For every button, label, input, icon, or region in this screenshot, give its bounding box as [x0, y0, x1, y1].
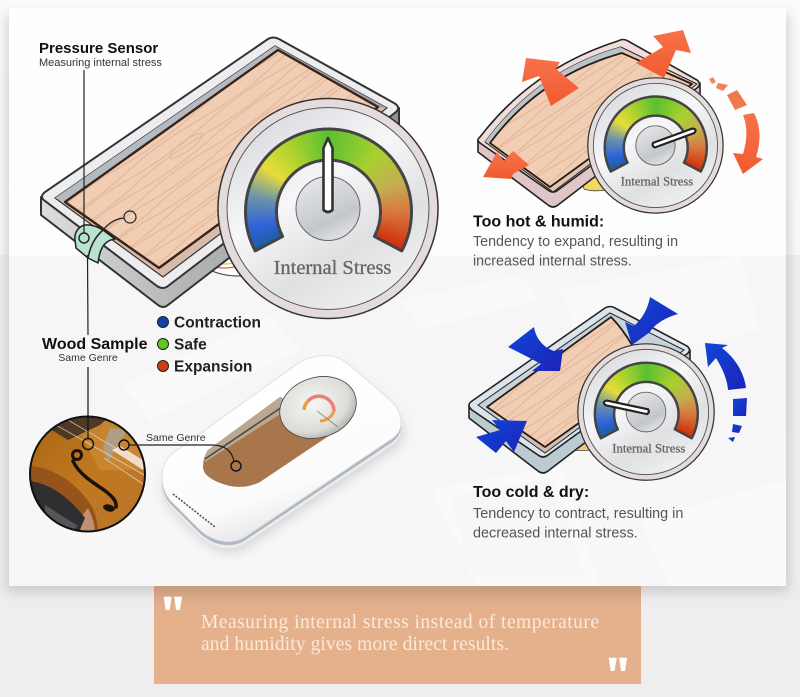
violin border	[30, 416, 145, 532]
cold recess	[478, 313, 684, 453]
gauge: cold and dry	[578, 344, 715, 481]
text block: too cold and dry: decreased internal stress.	[473, 526, 638, 542]
legend: contraction: Contraction	[174, 314, 261, 332]
wood sample	[65, 50, 378, 268]
wood window	[203, 397, 345, 487]
arrow: stress falling dashed curve	[705, 343, 747, 442]
arrow: expand up-left	[522, 58, 579, 106]
gauge: cold and dry: Internal Stress	[612, 442, 685, 456]
hot recess wall	[485, 47, 697, 192]
device body	[162, 356, 401, 542]
frame top face	[42, 38, 398, 288]
wire end marker	[124, 211, 136, 223]
caption: same genre: Same Genre	[58, 352, 118, 364]
recess walls	[55, 46, 278, 202]
legend: expansion: Expansion	[174, 358, 252, 376]
text block: too cold and dry	[473, 484, 683, 542]
device shadow	[164, 366, 403, 552]
text block: too cold and dry: Tendency to contract, resulting in	[473, 506, 683, 522]
layers under cold frame	[570, 436, 592, 450]
cold wood side strip	[487, 375, 640, 452]
illustration: hot and humid frame	[478, 40, 700, 207]
arrow: contract lower-left	[476, 420, 527, 453]
hot frame top	[478, 40, 700, 192]
cold frame side	[469, 350, 690, 473]
heading: pressure sensor: Pressure Sensor	[39, 40, 158, 57]
legend: safe: Safe	[174, 336, 207, 354]
laminate layers under frame	[205, 240, 240, 276]
hot wood sample	[490, 53, 692, 187]
quote text: and humidity gives more direct results.	[201, 634, 509, 655]
glass gauge lens	[272, 367, 364, 448]
quote text	[201, 612, 599, 655]
leader line to violin	[87, 367, 89, 439]
text block: too hot and humid: Too hot & humid:	[473, 214, 604, 230]
caption: measuring internal stress: Measuring internal stress	[39, 57, 162, 69]
gauge: large internal stress	[218, 98, 440, 320]
quote text: Measuring internal stress instead of temperature	[201, 612, 599, 633]
heading: wood sample: Wood Sample	[42, 336, 148, 353]
device vent dots	[173, 494, 215, 527]
marker on device sample	[231, 461, 241, 471]
violin photo	[28, 367, 148, 534]
gauge: hot and humid	[588, 78, 724, 214]
sensor device product	[162, 356, 403, 552]
illustration: main frame with wood sample	[41, 38, 399, 307]
leader line: wood sample	[86, 255, 89, 335]
opening quote mark: "	[159, 585, 187, 641]
gauge: large internal stress: Internal Stress	[274, 257, 391, 279]
leader line: pressure sensor	[83, 70, 85, 233]
illustration: cold and dry frame	[469, 306, 690, 473]
hot frame side	[478, 83, 700, 207]
cold wood sample	[487, 317, 632, 447]
arrow: expand down-left	[483, 151, 529, 179]
recess back wall	[275, 46, 387, 108]
text block: too hot and humid	[473, 214, 678, 270]
hot recess wall shade	[485, 47, 622, 143]
marker on bridge side	[119, 440, 129, 450]
text block: too hot and humid: Tendency to expand, resulting in	[473, 234, 678, 250]
legend	[158, 314, 261, 376]
faint background shapes	[122, 255, 786, 586]
pressure sensor clip	[75, 225, 115, 263]
device seam stripe	[162, 359, 401, 545]
callout: quote box	[154, 585, 641, 697]
connector line: violin to sample	[129, 445, 234, 461]
cold frame top	[469, 306, 690, 457]
sensor wire	[103, 218, 124, 230]
marker on violin	[82, 438, 94, 450]
gauge: hot and humid: Internal Stress	[621, 175, 693, 189]
arrow: contract upper-right	[625, 297, 678, 345]
text block: too hot and humid: increased internal stress.	[473, 254, 632, 270]
label: same genre connector: Same Genre	[146, 432, 206, 444]
text block: too cold and dry: Too cold & dry:	[473, 484, 589, 501]
device lower shell	[162, 363, 401, 549]
arrow: contract upper-left	[508, 327, 563, 371]
frame side face	[41, 108, 399, 307]
frame recess	[55, 46, 387, 277]
arrow: expand up-right	[636, 30, 691, 78]
layers under hot frame	[582, 170, 606, 191]
arrow: stress rising dashed curve	[709, 77, 763, 174]
